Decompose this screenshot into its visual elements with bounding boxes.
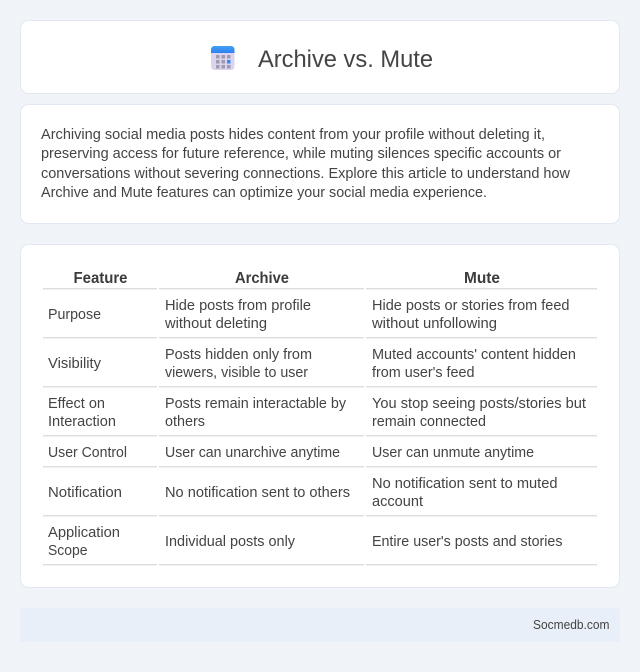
row: User Control: User Control — [48, 445, 127, 461]
title: Archive vs. Mute — [258, 46, 433, 73]
row: Effect on Interaction: others — [165, 414, 205, 430]
row: Purpose: Purpose — [48, 307, 101, 323]
row: Visibility: Visibility — [48, 356, 102, 372]
row: User Control — [48, 445, 534, 461]
icon: calendar — [211, 46, 234, 70]
row: Notification: No notification sent to others — [165, 485, 350, 501]
text block: introduction — [41, 127, 571, 201]
row: Effect on Interaction: Posts remain interactable by — [165, 396, 347, 412]
text block: introduction: conversations without severing connections. Explore this article to understand how — [41, 166, 571, 182]
row: Visibility: from user's feed — [372, 365, 474, 381]
table header: Feature — [74, 270, 128, 287]
panel: comparison table — [20, 244, 620, 588]
row: Purpose — [48, 298, 570, 332]
text block: introduction: Archive and Mute features can optimize your social media experience. — [41, 185, 487, 201]
row: Notification: No notification sent to muted — [372, 476, 558, 492]
row: Purpose: Hide posts from profile — [165, 298, 311, 314]
row: Notification: account — [372, 494, 423, 510]
row: Application Scope: Entire user's posts and stories — [372, 534, 562, 550]
panel: introduction — [20, 104, 620, 224]
row: Effect on Interaction — [48, 396, 586, 430]
row: Visibility: Muted accounts' content hidden — [372, 347, 576, 363]
table header: Archive — [235, 270, 289, 287]
text block: introduction: Archiving social media posts hides content from your profile without deleting it, — [41, 127, 545, 143]
table header: Mute — [464, 270, 500, 287]
row: Purpose: without unfollowing — [371, 316, 497, 332]
row: Effect on Interaction: remain connected — [372, 414, 486, 430]
row: Application Scope: Scope — [48, 543, 88, 559]
footer — [20, 608, 620, 642]
row: Notification: Notification — [48, 485, 122, 501]
row: Notification — [48, 476, 558, 510]
row: Application Scope — [48, 525, 562, 559]
row: Purpose: without deleting — [164, 316, 267, 332]
table header — [74, 270, 500, 287]
row: Effect on Interaction: Effect on — [48, 396, 105, 412]
row: Purpose: Hide posts or stories from feed — [372, 298, 570, 314]
panel: title card — [20, 20, 620, 94]
footer credit: Socmedb.com — [533, 618, 610, 632]
row: Visibility: viewers, visible to user — [165, 365, 308, 381]
row: Effect on Interaction: Interaction — [48, 414, 116, 430]
row: User Control: User can unarchive anytime — [165, 445, 340, 461]
row: User Control: User can unmute anytime — [372, 445, 534, 461]
row: Effect on Interaction: You stop seeing posts/stories but — [372, 396, 586, 412]
row: Visibility: Posts hidden only from — [165, 347, 312, 363]
row: Visibility — [48, 347, 576, 381]
row: Application Scope: Application — [48, 525, 120, 541]
row: Application Scope: Individual posts only — [165, 534, 296, 550]
text block: introduction: preserving access for future reference, while muting silences specific accounts or — [41, 146, 561, 162]
